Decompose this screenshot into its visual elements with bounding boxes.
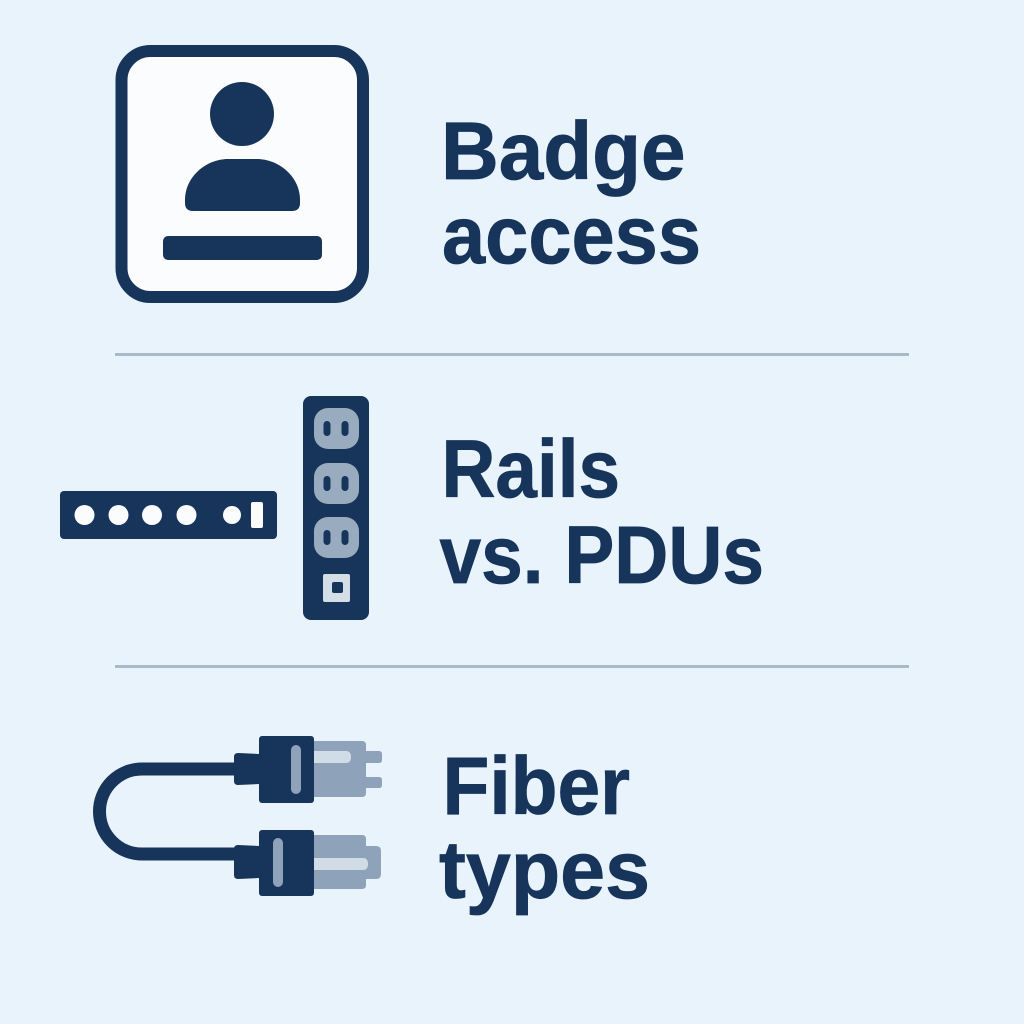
heading: fiber types: types bbox=[439, 825, 650, 916]
cable loop bbox=[100, 769, 240, 854]
icon: fiber cable bbox=[100, 736, 382, 896]
heading: badge access bbox=[441, 106, 701, 281]
upper connector bbox=[234, 736, 382, 803]
heading: rails vs. PDUs bbox=[440, 424, 764, 601]
heading: badge access: access bbox=[442, 190, 701, 281]
icon: rack rail bbox=[60, 491, 277, 539]
badge name bar bbox=[163, 236, 322, 260]
lower connector bbox=[234, 830, 381, 896]
icon: badge bbox=[122, 51, 363, 297]
heading: fiber types bbox=[439, 741, 650, 916]
heading: badge access: Badge bbox=[441, 106, 686, 197]
icon: power distribution unit bbox=[303, 396, 369, 620]
heading: fiber types: Fiber bbox=[442, 741, 630, 832]
badge head bbox=[210, 82, 274, 146]
heading: rails vs. PDUs: vs. PDUs bbox=[440, 510, 764, 601]
heading: rails vs. PDUs: Rails bbox=[442, 424, 620, 515]
badge shoulders bbox=[185, 159, 300, 211]
